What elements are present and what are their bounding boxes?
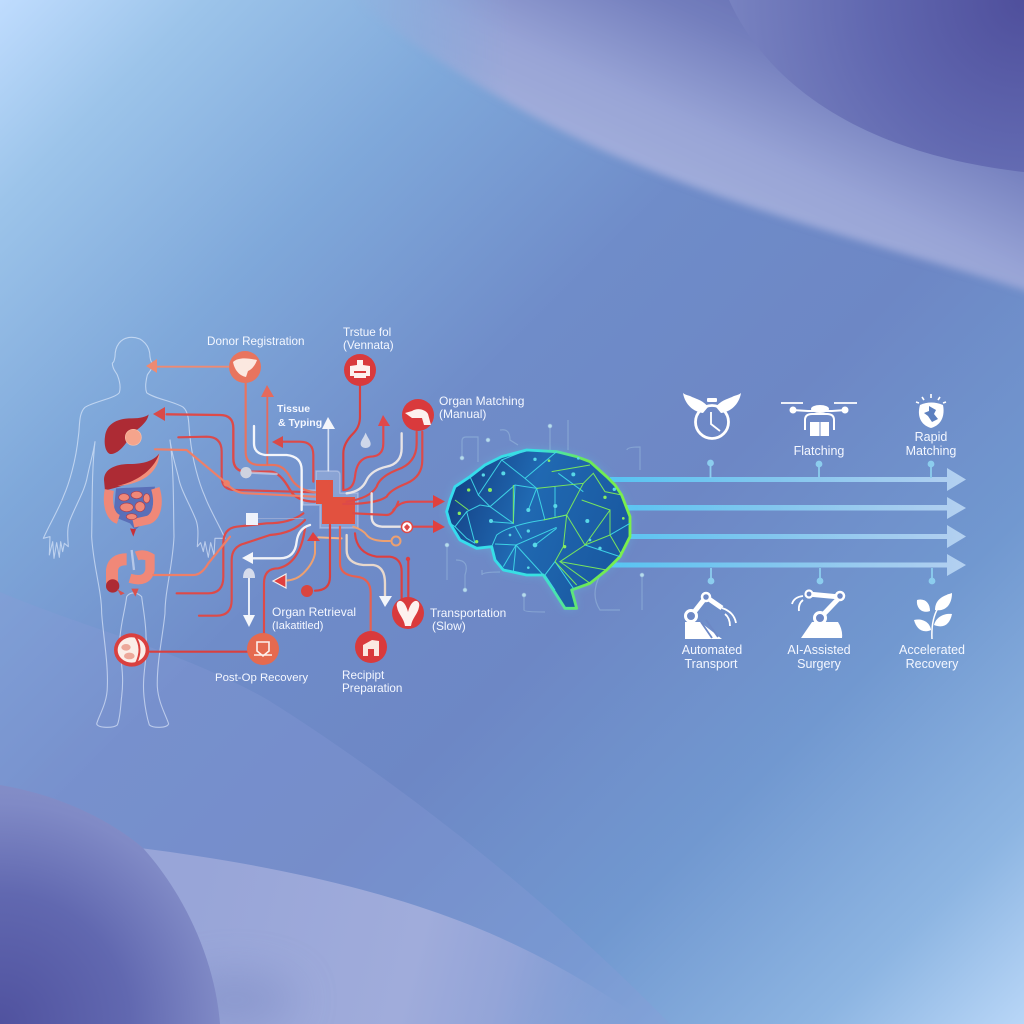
white droplet (361, 433, 371, 448)
connector: intestine salmon line (153, 537, 230, 575)
label: surgery: Surgery (797, 657, 842, 671)
icon: winged stopwatch (683, 393, 741, 438)
connector: matching line 1 (347, 432, 417, 502)
connector: tissue down line (343, 385, 360, 490)
salmon junction dot (223, 480, 230, 487)
brain network lines: cyan (450, 450, 630, 590)
connector: transport red curve (355, 533, 402, 598)
background shape: top right dark corner (729, 0, 1024, 172)
central chip (303, 471, 358, 528)
circuit lines: lower half (150, 493, 433, 652)
brain glow (447, 450, 630, 608)
connector: donor down line (246, 383, 315, 492)
node: post-op recovery (247, 633, 279, 665)
heart node (402, 522, 412, 532)
icon: rapid matching shield (916, 394, 946, 428)
arrowhead: brain lower (433, 520, 445, 533)
background swoosh: top right band (410, 0, 1024, 294)
connector: orange retrieval line (286, 542, 315, 581)
node: transportation (392, 597, 424, 629)
connector: square thin (258, 517, 303, 519)
background swoosh: bottom left band (140, 848, 650, 1024)
chip red shape (316, 480, 355, 524)
label: tissue typing line two: & Typing (278, 417, 322, 429)
label: recipient line two: Preparation (342, 682, 402, 695)
arrowhead: salmon up (261, 385, 274, 397)
human body outline (43, 337, 225, 727)
connector: liver arrow line (167, 414, 315, 502)
organ: kidney (114, 633, 149, 667)
label: slow: (Slow) (432, 619, 466, 633)
brain network lines: green (455, 465, 622, 585)
label: organ retrieval: Organ Retrieval (272, 605, 356, 619)
label: recovery: Recovery (906, 657, 959, 671)
arrowheads group (146, 359, 445, 627)
arrowhead: red left (272, 436, 283, 448)
arrowhead: retrieval triangle (273, 574, 286, 588)
white double arrow stem (246, 577, 252, 616)
icon: delivery drone (781, 403, 857, 436)
label: matching: Matching (906, 444, 956, 458)
label: accelerated: Accelerated (899, 643, 965, 657)
arrowhead: to head (146, 359, 157, 373)
arrowhead: to liver (153, 407, 165, 421)
node: recipient preparation (355, 631, 387, 663)
icon: recovery hands (254, 642, 272, 656)
connector: recipient line (340, 527, 371, 633)
label: recipient line one: Recipipt (342, 669, 385, 682)
background swoosh: shading at foot of band (175, 976, 295, 1024)
connector: lower right arrow line (412, 523, 433, 530)
faint circuit traces around brain (445, 420, 644, 612)
connector: up arrow stem right (343, 425, 383, 490)
connector: white arrow down (347, 535, 385, 597)
icon: sprouting leaves (914, 593, 952, 639)
connector: kidney line (150, 648, 250, 655)
label: automated: Automated (682, 643, 742, 657)
arrowhead: red up chip (307, 532, 320, 541)
arrowhead: red up right (378, 415, 390, 426)
connector: red dot line (315, 525, 330, 591)
brain network nodes (482, 457, 616, 569)
organs group (104, 414, 159, 667)
connector: upper right curve (353, 502, 398, 515)
label: ai-assisted: AI-Assisted (787, 643, 851, 657)
background shape: bottom left dark corner (0, 785, 220, 1024)
connector: salmon line (155, 449, 315, 497)
label: post-op recovery: Post-Op Recovery (215, 672, 308, 684)
arrows to the right of brain (610, 468, 966, 576)
arrowhead: double arrow bottom (243, 615, 255, 627)
grey node (240, 467, 252, 478)
connector: white left arrow line (253, 525, 310, 558)
connector: white line (254, 426, 302, 510)
connector: tan horizontal (318, 534, 342, 541)
transport top dot (406, 557, 410, 561)
node: organ matching (402, 399, 434, 431)
white square (246, 513, 258, 525)
organ: lower bowel (106, 550, 150, 597)
icon: matching organ (405, 409, 431, 425)
brain network nodes: green (458, 459, 625, 548)
red dot node (301, 585, 313, 597)
node: donor registration (229, 351, 261, 383)
connector: gallbladder line (178, 437, 315, 492)
top row stems (708, 460, 934, 478)
organ: stomach wedge (117, 453, 159, 486)
connector: right arrow line (393, 502, 434, 510)
label: rapid: Rapid (915, 430, 947, 444)
label: transport: Transport (684, 657, 738, 671)
orange ring node (392, 536, 400, 546)
connector: left red upper (177, 513, 303, 593)
connector: upward salmon arrow stem (265, 396, 270, 464)
connector: post-op vertical (264, 528, 305, 633)
label: organ matching: Organ Matching (439, 394, 524, 408)
organ: lower liver (104, 453, 159, 491)
arrowhead: white left (242, 552, 253, 564)
chip halo (303, 471, 358, 528)
label: manual: (Manual) (439, 407, 486, 421)
background swoosh: lower left band (0, 592, 670, 1024)
connector: left arrow stem (283, 442, 313, 482)
label: tissue typing line one: Tissue (277, 403, 310, 415)
arrow 4 (610, 554, 966, 576)
node: tissue (344, 354, 376, 386)
double arrow dome top (243, 568, 255, 578)
icon: liver (233, 358, 257, 377)
label: retrieval sub: (Iakatitled) (272, 620, 323, 632)
brain silhouette (447, 450, 630, 608)
grey node tail (252, 473, 277, 474)
connector: white curve right (347, 433, 402, 493)
connector: transport stem (405, 559, 412, 600)
arrowhead: white up (322, 417, 335, 429)
connector: matching line 2 (343, 432, 422, 504)
connector: donor to head (157, 364, 230, 369)
icon: tissue figure (350, 360, 370, 378)
label: donor registration: Donor Registration (207, 335, 304, 348)
icon: recipient (363, 640, 379, 656)
connector: left red lower (199, 520, 305, 616)
arrow 1 (610, 468, 966, 491)
circuit lines: upper half (155, 367, 434, 510)
organ: intestines (108, 487, 157, 537)
connector: white to node (372, 493, 401, 527)
label: tissue top: Trstue fol (343, 326, 391, 339)
arrow 2 (610, 497, 966, 519)
arrowhead: white down (379, 596, 392, 607)
connector: white up arrow stem (326, 428, 331, 471)
connector: orange ring line (353, 527, 390, 541)
icon: robot arm transport (685, 593, 736, 639)
icon: robot arm surgery (792, 590, 844, 638)
organ: upper liver (105, 414, 149, 454)
label: flatching: Flatching (794, 444, 844, 458)
organ: gallbladder circle (125, 429, 141, 445)
icon: heart (397, 601, 419, 626)
arrow 3 (610, 525, 966, 548)
brain (447, 450, 630, 608)
arrowhead: brain upper (433, 495, 445, 508)
label: transportation: Transportation (430, 606, 506, 620)
bottom row stems (708, 568, 934, 584)
label: tissue sub: (Vennata) (343, 339, 394, 352)
